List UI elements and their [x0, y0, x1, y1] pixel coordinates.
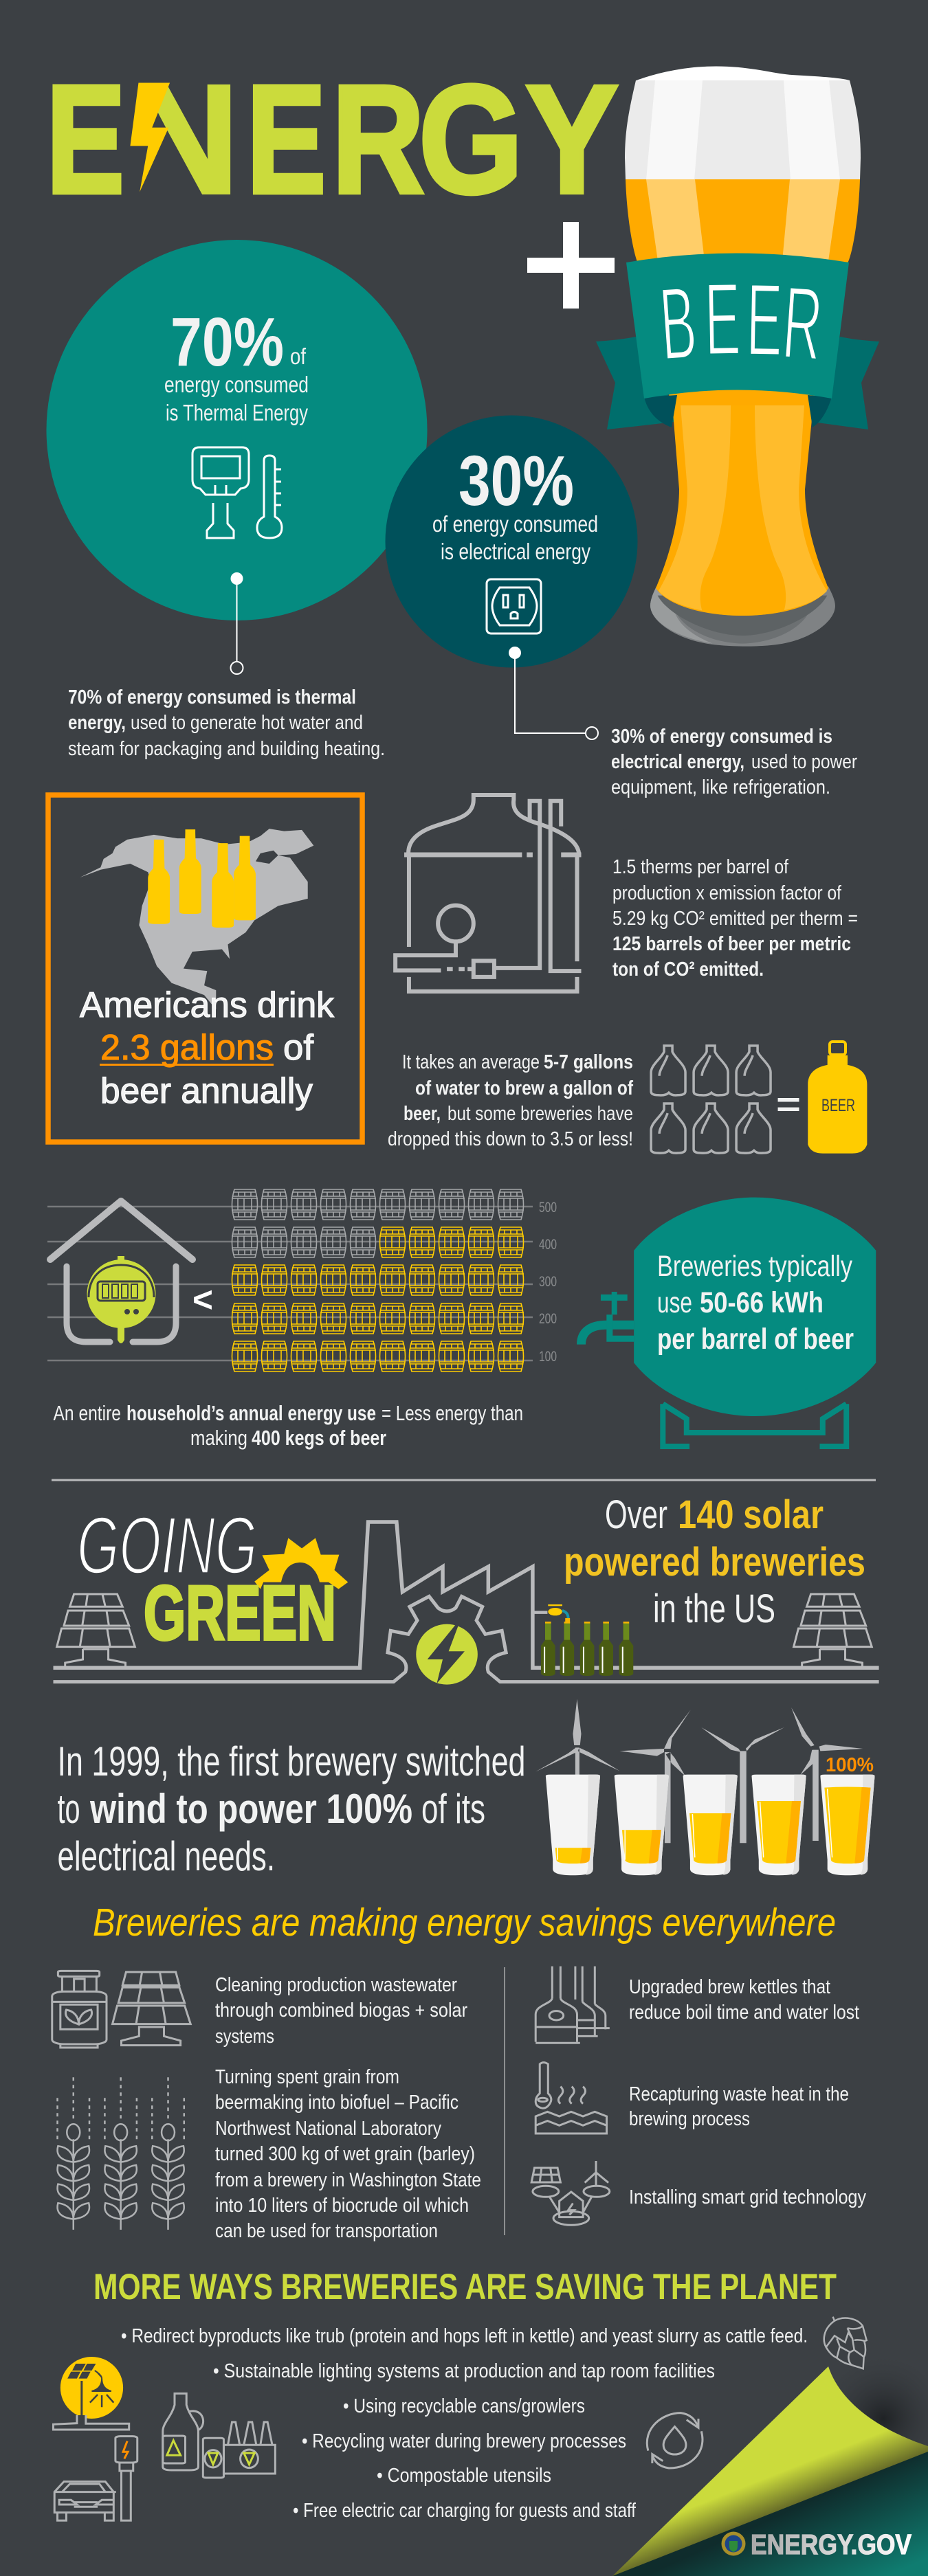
text: 1999 wind: of its: [421, 1786, 485, 1832]
icon: brew kettles: [535, 1967, 610, 2043]
foam: [637, 66, 850, 80]
icon: factory and gear: [53, 1522, 879, 1682]
text: solar breweries: [564, 1492, 865, 1631]
text: gallons of water: 5-7 gallons: [544, 1051, 633, 1073]
panel: Americans drink: [48, 795, 362, 1142]
text: therms: 1.5 therms per barrel of: [612, 856, 789, 878]
beer: [626, 179, 860, 616]
text: right savings list: brewing process: [629, 2108, 750, 2130]
bullet list: • Redirect byproducts like trub (protein and hops left in kettle) and yeast slurry as cattle feed.: [121, 2325, 808, 2347]
glass highlights: [646, 80, 840, 180]
keg rows: [232, 1189, 524, 1371]
text: household: 400 kegs of beer: [252, 1426, 386, 1450]
text: electrical explanation: [611, 726, 857, 798]
text: electrical explanation: used to power: [751, 751, 857, 773]
icon: smart grid: [531, 2161, 610, 2225]
headline: 2.3 gallons: [100, 1028, 274, 1068]
text: left savings list: Turning spent grain from: [215, 2066, 399, 2088]
banner: [626, 253, 849, 399]
headline: beer annually: [100, 1071, 313, 1111]
text: 1999 wind: wind to power 100%: [89, 1786, 412, 1832]
panel: 30% circle: [385, 415, 638, 739]
title: ENERGY: G: [419, 54, 523, 225]
stat: 70%: 70%: [170, 304, 284, 381]
text: gallons of water: beer,: [404, 1103, 441, 1125]
icon: six water jugs: [651, 1046, 771, 1153]
bullet list: • Free electric car charging for guests and staff: [293, 2500, 637, 2522]
bullet list: • Sustainable lighting systems at production and tap room facilities: [213, 2360, 715, 2382]
text: household: household’s annual energy use: [126, 1401, 376, 1425]
text: left savings list: can be used for transportation: [215, 2220, 438, 2242]
icon: water recycling: [647, 2413, 703, 2468]
beer highlights: [646, 179, 840, 261]
axis labels: 300: [539, 1274, 557, 1290]
page curl with corner: [612, 2347, 928, 2576]
word: BEER: E: [704, 262, 742, 377]
icon: power outlet: [487, 579, 541, 634]
icon: wind turbines: [535, 1699, 863, 1843]
headline: [80, 985, 335, 1111]
axis labels: 500: [539, 1200, 557, 1216]
text: right savings list: Installing smart grid technology: [629, 2186, 866, 2208]
text: electrical explanation: electrical energy,: [611, 751, 744, 773]
circle caption: energy consumed: [164, 372, 309, 397]
bullet list: [121, 2325, 808, 2522]
word: BEER: R: [780, 265, 826, 383]
plus sign: [527, 222, 615, 309]
circle caption: of energy consumed: [432, 511, 598, 537]
text: left savings list: into 10 liters of biocrude oil which: [215, 2195, 469, 2217]
word: BEER: [656, 262, 826, 383]
glass base: [650, 586, 835, 647]
axis labels: [539, 1200, 557, 1365]
beer lower core: [700, 405, 786, 616]
divider: [52, 1479, 876, 1481]
icon: power bolt: [416, 1624, 478, 1685]
text: household: making: [190, 1426, 247, 1450]
connector 70%: [231, 572, 243, 674]
icon: beer growler: [808, 1042, 867, 1154]
icon: house with meter: [50, 1201, 192, 1343]
icon: car charging: [54, 2437, 137, 2520]
text: left savings list: turned 300 kg of wet grain (barley): [215, 2143, 475, 2165]
text: household: [54, 1401, 523, 1450]
text: gallons of water: [388, 1051, 633, 1150]
text: thermal explanation: steam for packaging and building heating.: [68, 738, 385, 760]
icon: thermal meter and thermometer: [192, 447, 282, 538]
text: gallons of water: dropped this down to 3.5 or less!: [388, 1128, 633, 1150]
axis labels: 400: [539, 1237, 557, 1253]
underline: [100, 1064, 274, 1066]
bullet list: • Using recyclable cans/growlers: [343, 2395, 585, 2417]
headline: Americans drink: [80, 985, 335, 1025]
tank text: per barrel of beer: [657, 1323, 854, 1356]
text: solar breweries: Over: [605, 1492, 667, 1537]
text: left savings list: from a brewery in Washington State: [215, 2169, 481, 2191]
axis labels: 100: [539, 1349, 557, 1365]
glass upper empty: [625, 80, 861, 180]
beer lower light: [659, 405, 827, 616]
bullet list: • Compostable utensils: [377, 2465, 551, 2487]
text: right savings list: Recapturing waste heat in the: [629, 2083, 849, 2105]
text: electrical explanation: equipment, like refrigeration.: [611, 776, 830, 798]
text: solar breweries: 140 solar: [678, 1492, 824, 1537]
text: gallons of water: but some breweries have: [448, 1103, 633, 1125]
icon: brew kettle: [395, 795, 582, 992]
growler label: BEER: [821, 1096, 855, 1115]
icon: solar panels: [57, 1594, 872, 1666]
glass base lens: [658, 596, 827, 636]
text: therms: 5.29 kg CO² emitted per therm =: [612, 908, 858, 930]
text: household: = Less energy than: [382, 1401, 523, 1425]
text: left savings list: [215, 1974, 481, 2242]
icon: wheat: [58, 2077, 184, 2230]
circle caption: of: [290, 344, 307, 369]
headline: of: [283, 1028, 314, 1068]
tank text: Breweries typically: [657, 1250, 852, 1283]
axis labels: 200: [539, 1311, 557, 1327]
panel: brewery tank: [582, 1198, 876, 1446]
title: ENERGY: R: [332, 54, 424, 225]
text: therms: [612, 856, 858, 981]
text: solar breweries: in the US: [653, 1587, 775, 1631]
text: left savings list: systems: [215, 2026, 274, 2048]
text: thermal explanation: used to generate hot water and: [131, 712, 363, 734]
icon: waste heat: [535, 2063, 607, 2133]
text: therms: 125 barrels of beer per metric: [612, 933, 851, 955]
glass base inner: [674, 605, 811, 644]
circle caption: is Thermal Energy: [166, 400, 308, 425]
title: ENERGY: E: [46, 54, 126, 225]
ribbon tails: [596, 337, 879, 429]
beer bottles: [148, 829, 256, 928]
text: electrical explanation: 30% of energy consumed is: [611, 726, 832, 748]
circle caption: [432, 511, 598, 564]
beer glass with banner: [596, 66, 879, 647]
column divider: [504, 1967, 505, 2235]
text: right savings list: Upgraded brew kettles that: [629, 1976, 830, 1998]
circle caption: [164, 344, 309, 425]
icon: five beer glasses: [546, 1775, 875, 1875]
text: right savings list: reduce boil time and water lost: [629, 2002, 859, 2024]
word: GREEN: GREEN: [144, 1570, 336, 1656]
text: 1999 wind: In 1999, the first brewery switched: [58, 1738, 525, 1784]
label: 100%: 100%: [826, 1754, 874, 1776]
logo: energy.gov: [722, 2529, 912, 2560]
tank text: use: [657, 1286, 692, 1319]
icon: recyclable containers: [163, 2393, 275, 2478]
title: ENERGY: E: [247, 54, 326, 225]
word: BEER: E: [745, 262, 783, 378]
map of North America: [80, 829, 313, 1009]
text: thermal explanation: [68, 686, 385, 760]
equals sign: =: [776, 1085, 801, 1123]
title: ENERGY: [46, 53, 618, 225]
text: 1999 wind: [58, 1738, 525, 1879]
text: left savings list: through combined biogas + solar: [215, 2000, 467, 2021]
icon: tap: [582, 1292, 634, 1345]
text: therms: ton of CO² emitted.: [612, 959, 764, 981]
text: gallons of water: It takes an average: [402, 1051, 540, 1073]
text: solar breweries: powered breweries: [564, 1540, 865, 1584]
text: therms: production x emission factor of: [612, 882, 842, 904]
icon: biogas tank and solar panel: [52, 1971, 190, 2048]
title: ENERGY: N: [131, 53, 239, 225]
text: left savings list: Northwest National Laboratory: [215, 2118, 441, 2140]
tank text: 50-66 kWh: [700, 1286, 824, 1319]
icon: green bottles with tap: [541, 1604, 633, 1676]
icon: hop: [824, 2317, 867, 2368]
connector 30%: [509, 647, 598, 739]
word: GOING: GOING: [77, 1500, 257, 1591]
icon: sun gear: [254, 1538, 348, 1589]
text: gallons of water: of water to brew a gallon of: [415, 1077, 633, 1099]
banner folds: [644, 395, 832, 427]
tank stand: [663, 1404, 846, 1446]
icon: solar street light: [53, 2357, 129, 2430]
bullet list: • Recycling water during brewery processes: [302, 2430, 626, 2452]
text: right savings list: [629, 1976, 866, 2208]
stat: 30%: 30%: [459, 441, 574, 520]
panel: going green: [53, 1492, 879, 1685]
text: 1999 wind: electrical needs.: [58, 1833, 275, 1879]
tank text: [657, 1250, 854, 1356]
less-than sign: <: [192, 1280, 213, 1320]
circle caption: is electrical energy: [441, 539, 590, 564]
text: left savings list: beermaking into biofuel – Pacific: [215, 2092, 459, 2114]
word: BEER: B: [656, 265, 700, 382]
title: ENERGY: Y: [526, 54, 618, 225]
text: thermal explanation: energy,: [68, 712, 126, 734]
glass base lighter left: [650, 586, 713, 644]
text: 1999 wind: to: [58, 1786, 80, 1832]
text: left savings list: Cleaning production wastewater: [215, 1974, 457, 1996]
text: thermal explanation: 70% of energy consumed is thermal: [68, 686, 356, 708]
panel: 70% circle: [47, 240, 428, 674]
chart: household vs kegs: [47, 1189, 557, 1371]
text: household: An entire: [54, 1401, 121, 1425]
